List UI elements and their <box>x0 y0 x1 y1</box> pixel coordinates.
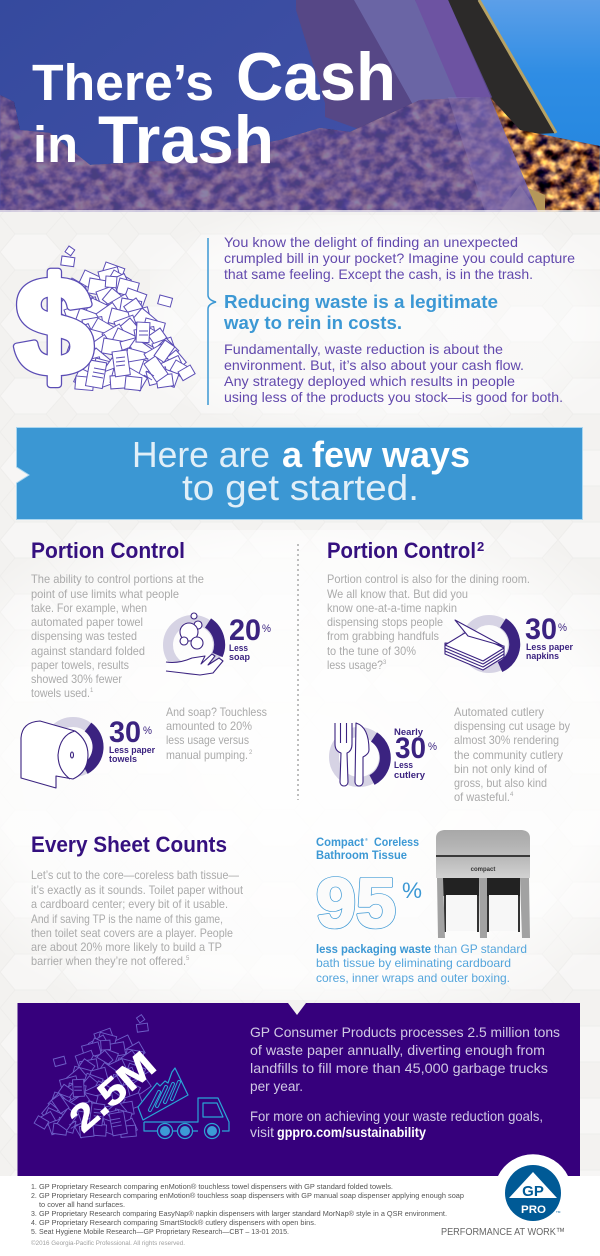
text: napkins: to the tune of 30% <box>327 644 416 658</box>
intro text: that same feeling. Except the cash, is in the trash. <box>224 266 533 282</box>
text: soap: manual pumping. <box>166 748 248 762</box>
text: portion control: against standard folded <box>31 644 145 658</box>
footnotes: to cover all hand surfaces. <box>39 1202 125 1209</box>
stat: 95%: 95 <box>316 864 396 942</box>
title: in <box>33 116 78 173</box>
footnotes: 4. <box>31 1220 37 1227</box>
text: every sheet counts: And if saving TP is the name of this game, <box>31 912 223 926</box>
stat: 20% less soap <box>166 613 271 675</box>
text: packaging waste: less packaging waste <box>316 942 431 956</box>
intro callout: way to rein in costs. <box>223 313 402 333</box>
text: soap: amounted to 20% <box>166 719 252 733</box>
text: napkins: We all know that. But did you <box>327 587 468 601</box>
stat: nearly 30% less cutlery: cutlery <box>394 770 425 780</box>
title: Cash <box>236 39 396 115</box>
stat: nearly 30% less cutlery: Nearly <box>394 727 423 737</box>
text: panel statistics: landfills to fill more than 45,000 garbage trucks <box>250 1060 548 1076</box>
heading: portion control 2: Portion Control <box>327 538 476 563</box>
text: portion control: point of use limits what people <box>31 587 179 601</box>
logo: GP Pro: GP <box>522 1183 544 1200</box>
text: panel statistics <box>250 1024 560 1094</box>
intro body text: Any strategy deployed which results in people <box>224 373 515 389</box>
logo: GP Pro: PRO <box>521 1204 546 1216</box>
column divider <box>297 544 299 800</box>
text: packaging waste: bath tissue by eliminating cardboard <box>316 956 511 970</box>
footnotes: GP Proprietary Research comparing enMotion® touchless soap dispensers with GP manual soap dispenser applying enough soap <box>39 1192 464 1200</box>
stat: 30% less paper napkins: % <box>558 622 567 634</box>
heading: portion control 2: 2 <box>477 539 484 554</box>
intro body text <box>224 341 563 405</box>
stat: 20% less soap: % <box>262 623 271 635</box>
text: portion control <box>31 572 204 700</box>
product label: Compact <box>316 837 364 849</box>
stat: 30% less paper napkins: Less paper <box>526 642 573 652</box>
text: portion control: towels used. <box>31 686 90 700</box>
stat: 30% less paper napkins: napkins <box>526 651 559 661</box>
text: every sheet counts: Let’s cut to the core—coreless bath tissue— <box>31 868 239 882</box>
text: napkins: dispensing stops people <box>327 615 443 629</box>
text: napkins: from grabbing handfuls <box>327 629 439 643</box>
text: cutlery: bin not only kind of <box>454 762 548 776</box>
text: portion control: take. For example, when <box>31 601 147 615</box>
stat: 30% less paper napkins <box>445 613 573 670</box>
text: napkins <box>327 572 530 672</box>
copyright: ©2016 Georgia-Pacific Professional. All rights reserved. <box>31 1239 185 1247</box>
intro callout <box>223 292 498 333</box>
footnotes: 3. <box>31 1211 37 1218</box>
product label: Bathroom Tissue <box>316 850 407 862</box>
text: soap <box>166 705 267 762</box>
intro text: You know the delight of finding an unexpected <box>224 234 518 250</box>
text: panel statistics: GP Consumer Products processes 2.5 million tons <box>250 1024 560 1040</box>
stat: nearly 30% less cutlery: % <box>428 741 437 753</box>
stat: 30% less paper napkins: 30 <box>525 613 557 646</box>
icon: dollar sign and pile of paper: $ <box>15 250 93 404</box>
banner <box>16 428 582 520</box>
footnotes: Seat Hygiene Mobile Research—GP Proprietary Research—CBT – 13-01 2015. <box>39 1229 289 1236</box>
footnotes: 5. <box>31 1229 37 1236</box>
title: There’s <box>32 54 214 111</box>
text: cutlery: of wasteful. <box>454 790 510 804</box>
banner: to get started. <box>182 467 419 508</box>
text: napkins: know one-at-a-time napkin <box>327 601 457 615</box>
text: portion control: 1 <box>90 688 94 694</box>
text: every sheet counts: barrier when they’re not offered. <box>31 954 186 968</box>
text: cutlery: almost 30% rendering <box>454 733 559 747</box>
text: packaging waste: cores, inner wraps and outer boxing. <box>316 971 510 985</box>
banner: Here are <box>132 434 270 475</box>
intro callout: Reducing waste is a legitimate <box>224 292 498 312</box>
text: packaging waste: than GP standard <box>434 942 527 956</box>
intro body text: using less of the products you stock—is good for both. <box>224 389 563 405</box>
stat: nearly 30% less cutlery: Less <box>394 760 413 770</box>
text: portion control: The ability to control portions at the <box>31 572 204 586</box>
stat: 20% less soap: Less <box>229 643 248 653</box>
footnotes: 2. <box>31 1193 37 1200</box>
footnotes: GP Proprietary Research comparing EasyNap® napkin dispensers with larger standard MorNap® style in a QSR environment. <box>39 1210 447 1218</box>
heading: portion control: Portion Control <box>31 538 185 563</box>
text: panel statistics: of waste paper annually, diverting enough from <box>250 1042 545 1058</box>
text: napkins: Portion control is also for the dining room. <box>327 572 530 586</box>
bracket divider <box>208 238 216 405</box>
text: soap: And soap? Touchless <box>166 705 267 719</box>
text: every sheet counts <box>31 868 244 968</box>
text: every sheet counts: then toilet seat covers are a player. People <box>31 926 233 940</box>
text: every sheet counts: are about 20% more likely to build a TP <box>31 940 222 954</box>
stat: nearly 30% less cutlery: 30 <box>395 732 426 765</box>
text: website link: For more on achieving your waste reduction goals, <box>250 1108 543 1124</box>
text: soap: 2 <box>249 750 253 756</box>
stat: 20% less soap: 20 <box>229 614 261 647</box>
title: Trash <box>98 102 274 178</box>
heading: every sheet counts: Every Sheet Counts <box>31 832 227 857</box>
text: cutlery: gross, but also kind <box>454 776 547 790</box>
text: website link: gppro.com/sustainability <box>277 1124 426 1140</box>
footnotes: GP Proprietary Research comparing SmartStock® cutlery dispensers with open bins. <box>39 1219 316 1227</box>
stat: 30% less paper towels: towels <box>109 754 137 764</box>
text: napkins: 3 <box>383 660 387 666</box>
stat: 95%: % <box>402 878 422 903</box>
icon: pile of paper and dump truck: 2.5M <box>61 1043 164 1140</box>
text: every sheet counts: 5 <box>186 956 190 962</box>
stat: 20% less soap: soap <box>229 652 250 662</box>
icon: dollar sign and pile of paper: $ <box>15 250 93 404</box>
text: cutlery: the community cutlery <box>454 748 563 762</box>
footnotes: 1. <box>31 1184 37 1191</box>
stat: 95%: 95 <box>316 864 396 942</box>
footnotes <box>31 1183 464 1236</box>
text: portion control: showed 30% fewer <box>31 672 122 686</box>
text: packaging waste <box>316 942 527 985</box>
product: dispenser: compact <box>471 867 495 873</box>
text: website link: visit <box>250 1124 274 1140</box>
intro body text: environment. But, it’s also about your cash flow. <box>224 357 524 373</box>
text: soap: less usage versus <box>166 733 249 747</box>
stat: 30% less paper towels: Less paper <box>109 745 155 755</box>
text: cutlery: Automated cutlery <box>454 705 544 719</box>
header photo band <box>0 0 600 212</box>
text: cutlery <box>454 705 570 804</box>
text: website link <box>250 1108 543 1140</box>
stat: 30% less paper towels: % <box>143 725 152 737</box>
text: panel statistics: per year. <box>250 1078 303 1094</box>
text: napkins: less usage? <box>327 658 383 672</box>
product label: ® <box>365 837 368 842</box>
text: portion control: automated paper towel <box>31 615 143 629</box>
intro text: crumpled bill in your pocket? Imagine you could capture <box>224 250 575 266</box>
icon: dollar sign and pile of paper <box>15 246 195 404</box>
text: cutlery: 4 <box>510 792 514 798</box>
text: portion control: paper towels, results <box>31 658 129 672</box>
icon: pile of paper and dump truck <box>34 1015 229 1140</box>
product label <box>316 837 419 862</box>
intro body text: Fundamentally, waste reduction is about the <box>224 341 503 357</box>
stat: 30% less paper towels: 30 <box>109 716 141 749</box>
stat: nearly 30% less cutlery <box>334 723 437 786</box>
text: every sheet counts: it’s exactly as it sounds. Toilet paper without <box>31 883 244 897</box>
logo: GP Pro: PERFORMANCE AT WORK™ <box>441 1226 565 1238</box>
stat: 30% less paper towels <box>21 716 155 788</box>
banner: a few ways <box>282 434 470 475</box>
product: dispenser <box>436 830 530 938</box>
panel: waste paper <box>18 1003 580 1176</box>
intro text <box>224 234 575 282</box>
product label: Coreless <box>374 837 419 849</box>
text: every sheet counts: a cardboard center; every bit of it usable. <box>31 897 228 911</box>
text: portion control: dispensing was tested <box>31 629 137 643</box>
text: cutlery: dispensing cut usage by <box>454 719 570 733</box>
logo: GP Pro <box>441 1154 568 1238</box>
footnotes: GP Proprietary Research comparing enMotion® touchless towel dispensers with GP standard folded towels. <box>39 1183 393 1191</box>
logo: GP Pro: TM <box>556 1210 561 1214</box>
title <box>32 39 396 178</box>
